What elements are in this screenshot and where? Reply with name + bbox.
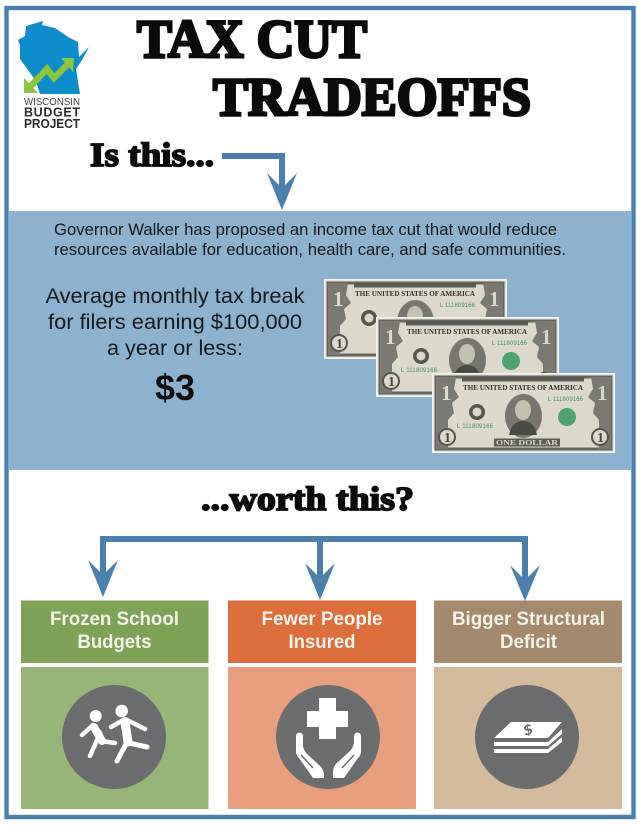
panel: bigger structural deficit — [434, 600, 622, 809]
dollar bill 2: THE UNITED STATES OF AMERICA — [407, 327, 528, 336]
dollar bill 1: L 111809166 — [440, 303, 476, 309]
dollar bill 2 — [376, 317, 559, 397]
dollar bill 3: 1 — [597, 431, 604, 446]
dollar bill 2: L 111809166 — [401, 368, 438, 374]
logo: Wisconsin Budget Project: BUDGET — [24, 106, 80, 120]
dollar bill 3: 1 — [444, 431, 451, 446]
panel: fewer people insured — [228, 600, 416, 809]
title — [137, 9, 531, 127]
dollar bill 1: 1 — [333, 287, 344, 311]
dollar bill 1: 1 — [489, 337, 496, 352]
panel heading: Insured — [288, 632, 356, 653]
icon: running children — [82, 705, 147, 761]
dollar bill 2: 1 — [541, 325, 552, 349]
dollar bill 1: 1 — [336, 337, 343, 352]
panel: frozen school budgets — [21, 600, 208, 809]
icon: stack of money: $ — [520, 721, 536, 740]
panel heading: Budgets — [78, 632, 152, 653]
branching arrows — [88, 536, 540, 601]
heading: Is this...: Is this... — [90, 137, 214, 174]
dollar bill 3: L 111809166 — [457, 424, 494, 430]
dollar bill 3: L 111809166 — [548, 397, 584, 403]
title: TRADEOFFS — [213, 67, 531, 127]
proposal text — [54, 221, 566, 259]
panel heading: Bigger Structural — [452, 609, 605, 630]
title: TAX CUT — [137, 9, 367, 69]
dollar bill 2: 1 — [388, 375, 395, 390]
dollar bill 3: ONE DOLLAR — [496, 439, 559, 447]
dollar bill 1: 1 — [489, 287, 500, 311]
dollar bill 3: 1 — [441, 381, 452, 405]
proposal text: Governor Walker has proposed an income tax cut that would reduce — [54, 221, 557, 239]
panel heading — [262, 609, 382, 653]
average tax break text: Average monthly tax break — [46, 284, 305, 308]
logo: Wisconsin Budget Project — [18, 21, 89, 131]
proposal text: resources available for education, health care, and safe communities. — [54, 241, 566, 259]
dollar bill 3 — [432, 373, 615, 453]
dollar bill 1: THE UNITED STATES OF AMERICA — [355, 289, 476, 298]
dollar bill 2: 1 — [385, 325, 396, 349]
average tax break text: for filers earning $100,000 — [48, 310, 302, 334]
panel heading — [452, 609, 605, 653]
average tax break text: a year or less: — [107, 336, 243, 360]
panel heading: Deficit — [500, 632, 558, 653]
logo: Wisconsin Budget Project: WISCONSIN — [24, 96, 80, 108]
dollar bill 3: 1 — [597, 381, 608, 405]
arrow: to proposal — [222, 153, 297, 210]
panel heading: Frozen School — [50, 609, 179, 630]
panel heading: Fewer People — [262, 609, 382, 630]
average tax break text — [46, 284, 305, 360]
dollar bill 2: L 111809166 — [492, 341, 528, 347]
dollar bill 2: 1 — [541, 375, 548, 390]
blue proposal band — [9, 211, 631, 470]
tax break amount: $3 — [155, 367, 195, 408]
icon: stack of money — [494, 721, 562, 753]
logo: Wisconsin Budget Project: PROJECT — [24, 117, 80, 131]
dollar bill 3: THE UNITED STATES OF AMERICA — [463, 383, 584, 392]
panel heading — [50, 609, 179, 653]
heading: ...worth this?: ...worth this? — [201, 481, 414, 518]
dollar bill 1 — [324, 279, 507, 359]
icon: hands holding medical cross — [296, 698, 361, 778]
